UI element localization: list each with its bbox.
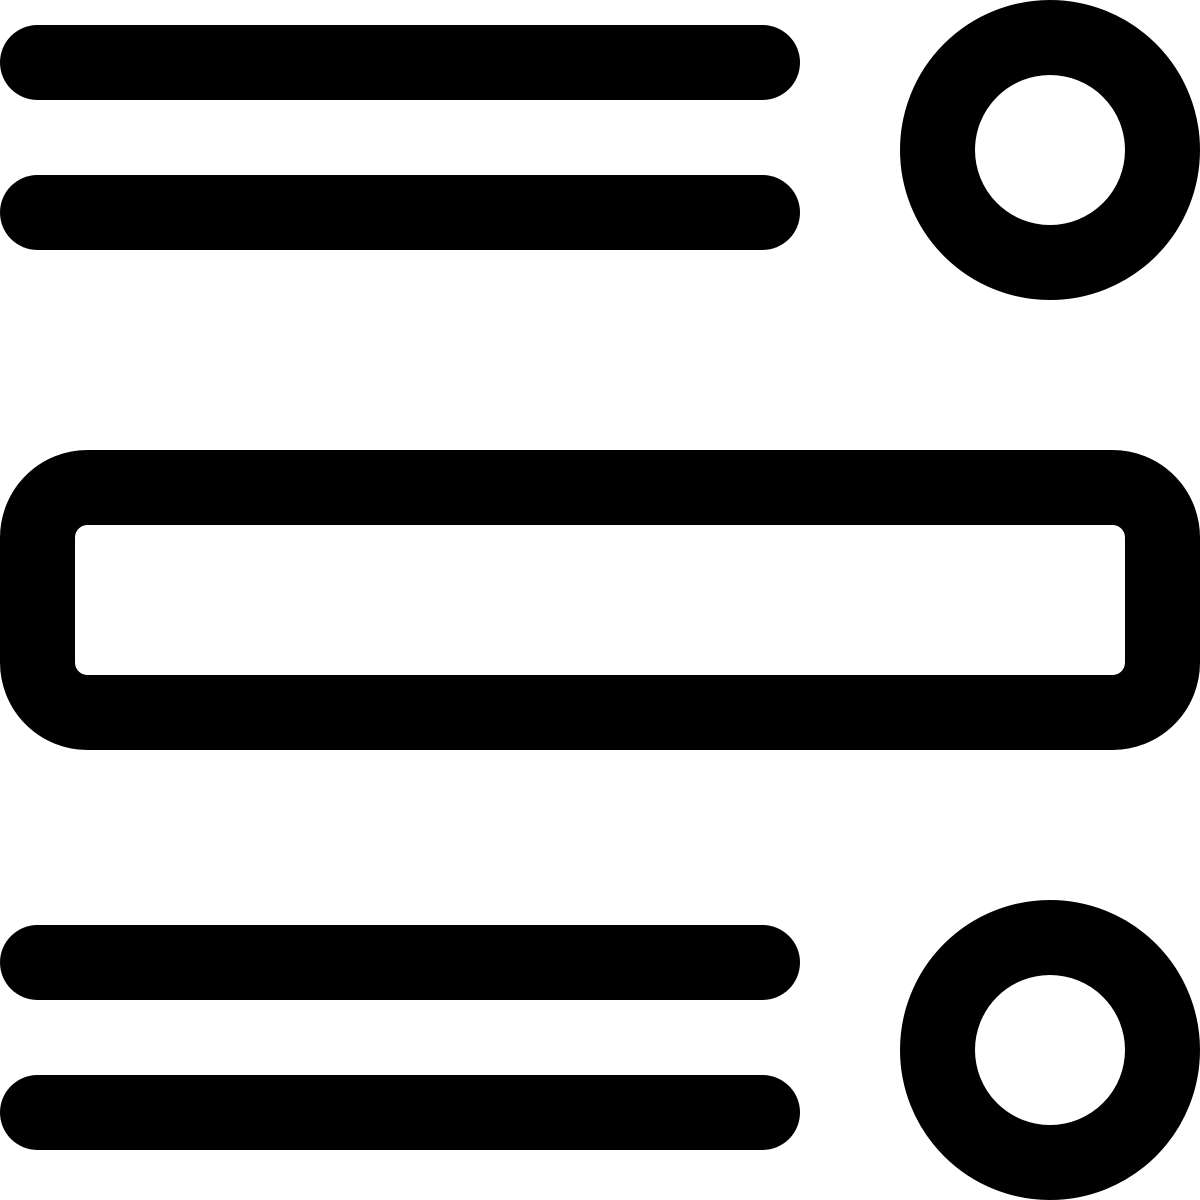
top line group bbox=[38, 62, 762, 212]
bottom line group bbox=[38, 962, 762, 1112]
bottom circle bbox=[938, 938, 1162, 1162]
top circle bbox=[938, 38, 1162, 262]
middle rounded rectangle bbox=[38, 488, 1162, 712]
